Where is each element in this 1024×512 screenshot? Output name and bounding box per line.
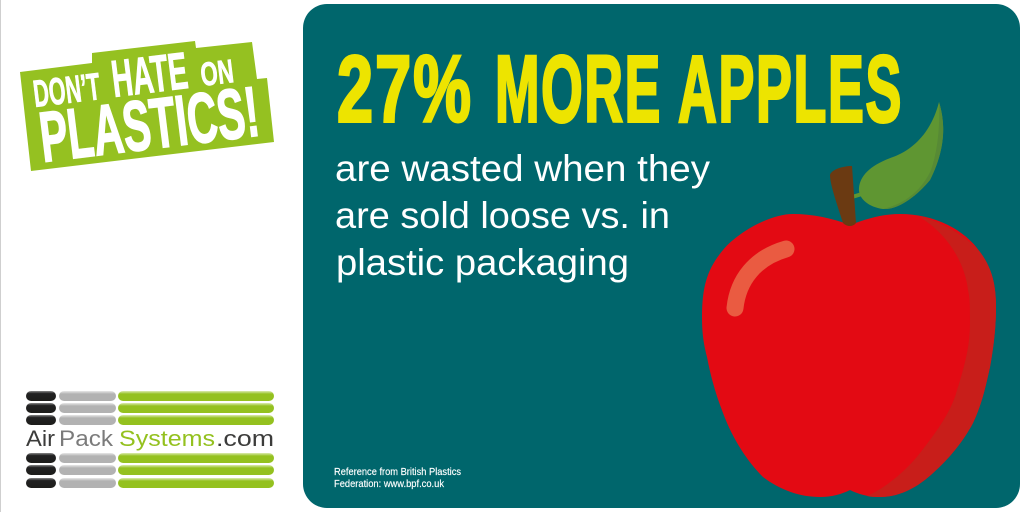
logo bars: bottom <box>26 453 274 488</box>
badge: Don't Hate On Plastics: ON <box>198 52 236 93</box>
badge: Don't Hate On Plastics: DON’T <box>31 66 103 116</box>
body text: are wasted when they <box>335 148 711 189</box>
panel: teal background <box>303 4 1020 508</box>
apple shaded side <box>867 216 996 497</box>
apple stem <box>830 166 856 226</box>
reference text <box>334 466 461 490</box>
reference text: Federation: www.bpf.co.uk <box>334 478 445 490</box>
logo wordmark <box>26 426 274 451</box>
apple leaf <box>859 102 943 209</box>
icon: apple <box>702 102 996 497</box>
body text: are sold loose vs. in <box>335 195 670 236</box>
apple leaf stem <box>852 194 862 197</box>
headline: MORE <box>495 36 662 142</box>
apple body <box>702 214 996 497</box>
logo: AirPackSystems.com <box>26 391 274 488</box>
headline <box>337 36 903 142</box>
badge: Don't Hate On Plastics: PLASTICS! <box>35 73 263 178</box>
badge: Don't Hate On Plastics <box>20 41 274 178</box>
apple highlight <box>735 249 786 308</box>
logo wordmark: Systems <box>119 426 215 451</box>
logo wordmark: Pack <box>59 426 114 451</box>
body text <box>335 148 711 283</box>
logo wordmark: Air <box>26 426 56 451</box>
reference text: Reference from British Plastics <box>334 466 461 478</box>
body text: plastic packaging <box>336 242 629 283</box>
badge: Don't Hate On Plastics: HATE <box>108 42 191 109</box>
logo bars: top <box>26 391 274 425</box>
headline: 27% <box>337 36 473 142</box>
logo wordmark: .com <box>216 426 274 451</box>
